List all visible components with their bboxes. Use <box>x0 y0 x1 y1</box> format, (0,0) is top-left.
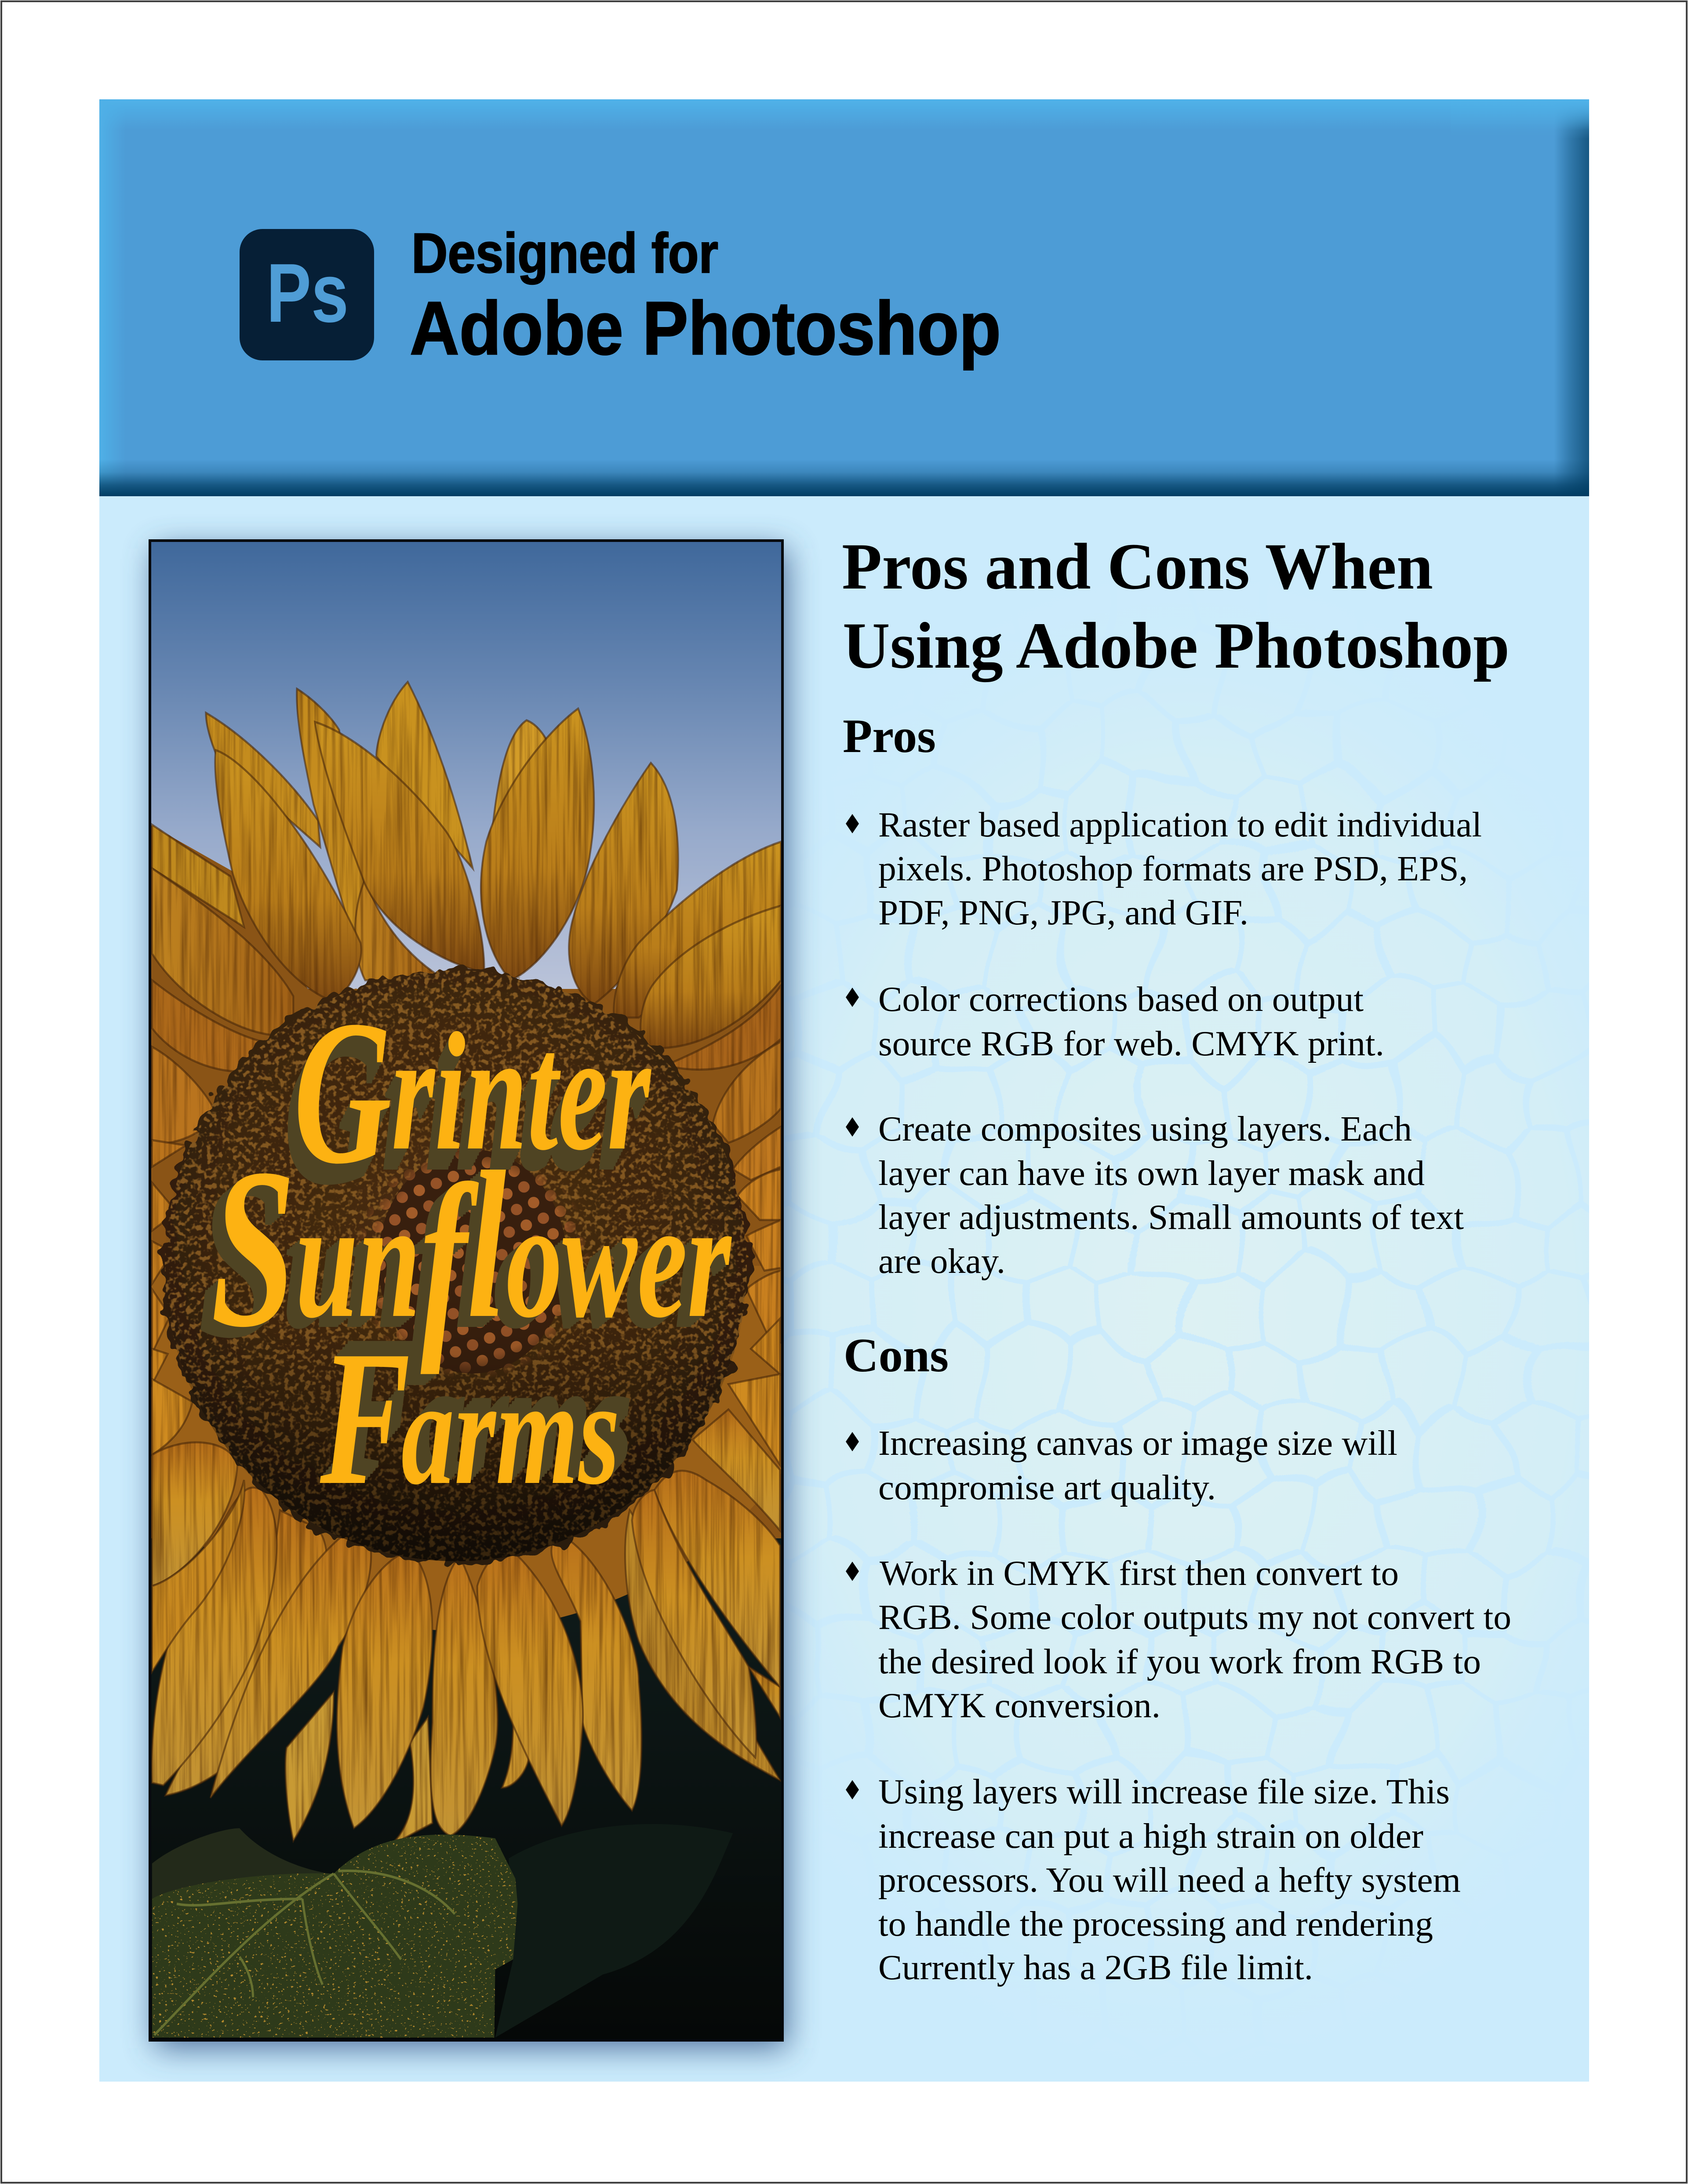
con bullet: CMYK first: the desired look if you work from RGB to <box>878 1642 1481 1681</box>
panel: light blue content background <box>99 483 1626 2110</box>
script word: Sunflower: l <box>467 1128 507 1362</box>
con bullet: file size: increase can put a high strain on older <box>878 1816 1423 1856</box>
con bullet: file size: Using layers will increase file size. This <box>878 1772 1450 1811</box>
cons list <box>846 1423 1511 1987</box>
pro bullet: raster: PDF, PNG, JPG, and GIF. <box>878 893 1248 932</box>
pro bullet: raster: Raster based application to edit individual <box>878 805 1482 844</box>
leaves <box>152 1824 733 2038</box>
sunflower petals <box>152 682 781 1846</box>
sky background <box>150 541 782 1552</box>
heading: Pros: Pros <box>843 709 936 763</box>
con bullet: file size: to handle the processing and rendering <box>878 1904 1433 1944</box>
script word: Sunflower: un <box>295 1166 421 1353</box>
title <box>842 530 1510 682</box>
pro bullet: composites: are okay. <box>878 1241 1005 1281</box>
script word: Farms: Farms <box>318 1311 620 1525</box>
pro bullet: composites <box>846 1109 1464 1281</box>
photo frame <box>150 541 782 2040</box>
script word: Sunflower: ower <box>506 1166 733 1353</box>
dark foliage background <box>150 1450 782 2040</box>
petal underlay <box>60 825 851 1631</box>
con bullet: file size: processors. You will need a hefty system <box>878 1860 1461 1900</box>
pro bullet: color corrections: Color corrections based on output <box>878 979 1364 1019</box>
photo drop shadow <box>155 549 787 2048</box>
text column <box>842 530 1511 1987</box>
icon: Photoshop Ps logo: Ps <box>266 247 349 340</box>
heading: Cons: Cons <box>844 1329 949 1382</box>
pro bullet: color corrections: source RGB for web. CMYK print. <box>878 1024 1384 1063</box>
pros list <box>846 805 1482 1281</box>
con bullet: file size <box>846 1772 1461 1987</box>
title: Pros and Cons When <box>842 530 1433 603</box>
pro bullet: raster: pixels. Photoshop formats are PSD, EPS, <box>878 849 1468 888</box>
con bullet: CMYK first: RGB. Some color outputs my not convert to <box>878 1597 1511 1637</box>
pro bullet: color corrections <box>846 979 1384 1063</box>
header banner <box>99 99 1589 496</box>
script word: Sunflower: S <box>211 1122 295 1374</box>
con bullet: CMYK first: Work in CMYK first then convert to <box>880 1553 1399 1593</box>
script word: Grinter: rinter <box>392 998 652 1185</box>
title: Using Adobe Photoshop <box>843 609 1510 682</box>
pro bullet: composites: layer adjustments. Small amounts of text <box>878 1197 1464 1237</box>
con bullet: canvas size <box>846 1423 1397 1507</box>
heading: Designed for: Designed for <box>411 222 718 285</box>
con bullet: file size: Currently has a 2GB file limit. <box>878 1948 1313 1987</box>
script word: Grinter: G <box>294 978 392 1206</box>
pro bullet: composites: layer can have its own layer mask and <box>878 1153 1425 1193</box>
icon: Photoshop Ps logo <box>240 229 374 360</box>
con bullet: canvas size: Increasing canvas or image size will <box>878 1423 1397 1463</box>
pro bullet: raster <box>846 805 1482 932</box>
farm name lettering <box>211 978 733 1525</box>
con bullet: canvas size: compromise art quality. <box>878 1468 1216 1507</box>
pro bullet: composites: Create composites using layers. Each <box>878 1109 1412 1148</box>
con bullet: CMYK first <box>846 1553 1511 1725</box>
heading: Adobe Photoshop: Adobe Photoshop <box>410 286 1001 371</box>
script word: Sunflower: f <box>421 1141 480 1375</box>
panel: sunflower photo <box>60 541 851 2040</box>
sunflower seed disk <box>150 963 765 1569</box>
con bullet: CMYK first: CMYK conversion. <box>878 1686 1160 1725</box>
